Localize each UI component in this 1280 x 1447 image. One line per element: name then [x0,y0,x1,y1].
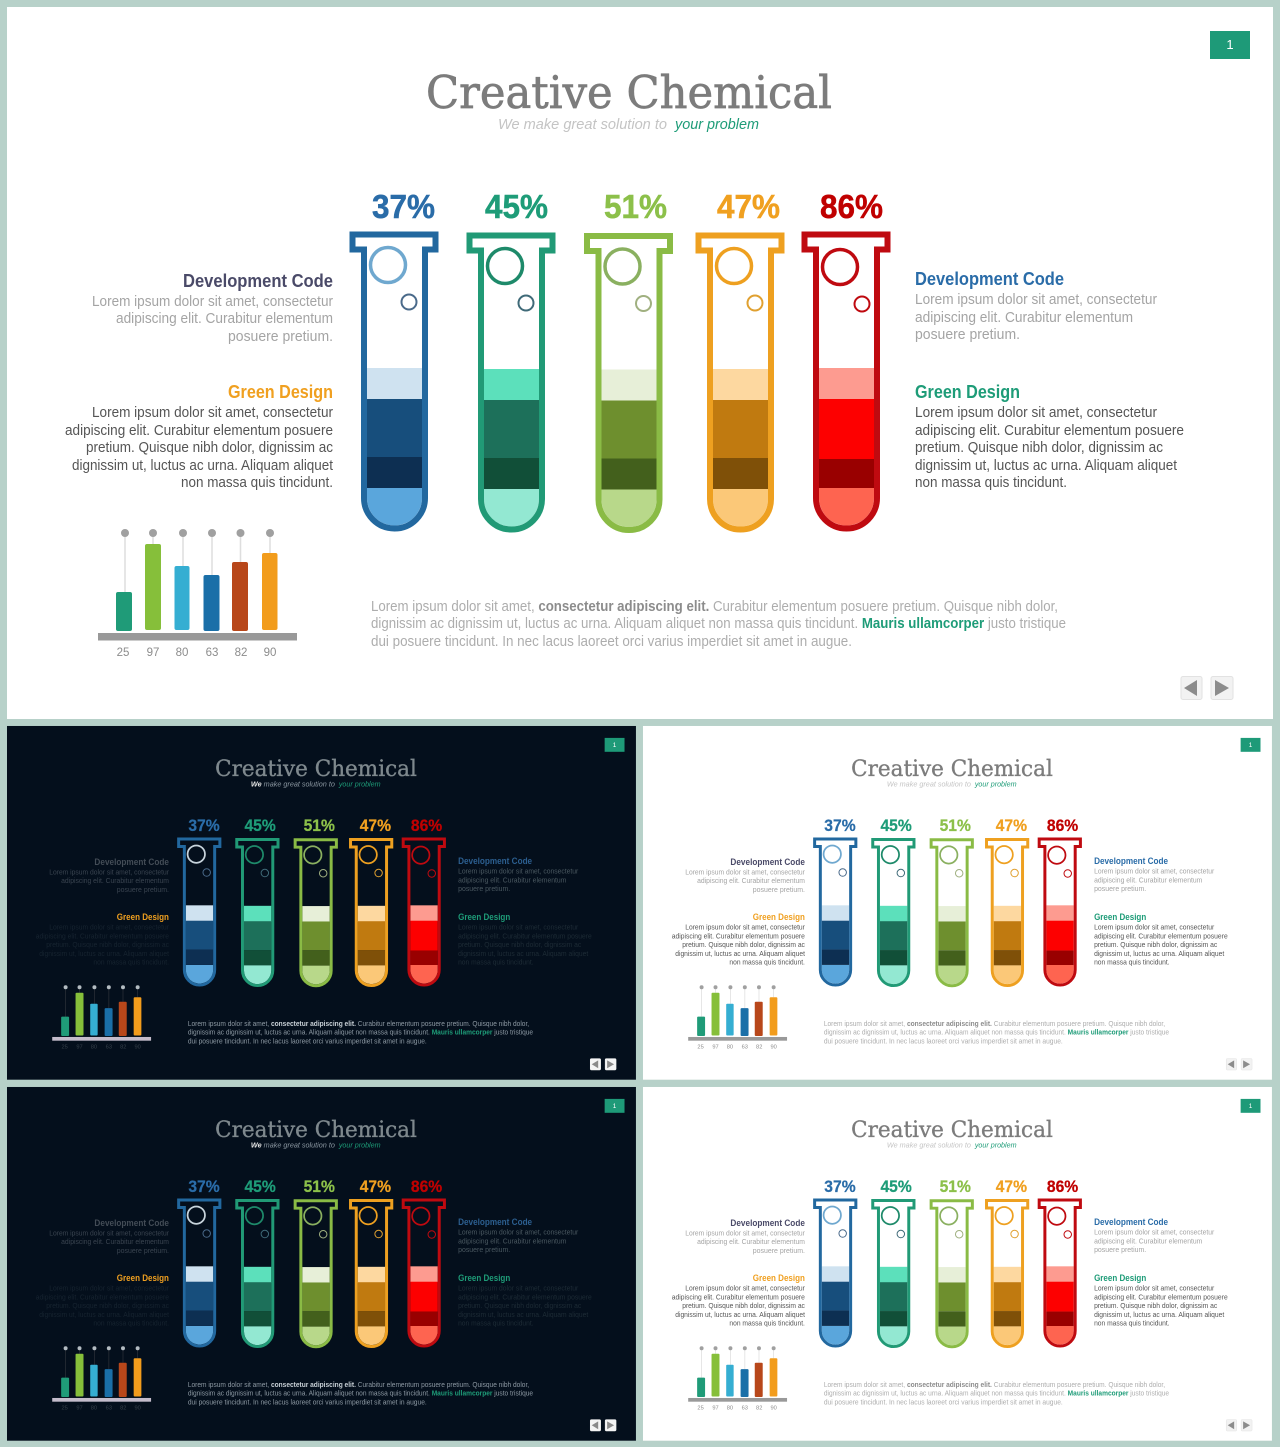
bar chart: 90 [770,1405,777,1411]
test tube: orange 47% [698,236,782,529]
right text: green design: dignissim ut, luctus ac urna. Aliquam aliquet [458,949,588,958]
left text: green design: Lorem ipsum dolor sit amet, consectetur [49,1284,170,1293]
left text: green design: non massa quis tincidunt. [93,1318,169,1327]
left text: green design: non massa quis tincidunt. [93,957,169,966]
percent labels: 51% [604,188,667,225]
page number badge [1241,738,1260,752]
percent labels: 47% [717,188,780,225]
right text: green design: dignissim ut, luctus ac urna. Aliquam aliquet [915,458,1177,474]
percent labels: 45% [880,817,912,835]
percent labels: 45% [244,1178,276,1196]
right text: green design: adipiscing elit. Curabitur elementum posuere [915,423,1184,439]
panel: dark slide bottom left [7,1087,636,1441]
left text: green design: dignissim ut, luctus ac urna. Aliquam aliquet [39,1310,169,1319]
test tube: green 45% [237,839,278,986]
test tube: red 86% [403,839,444,985]
right text: green design [1094,912,1228,966]
right text: development code: Lorem ipsum dolor sit amet, consectetur [1094,867,1215,876]
left text: green design: non massa quis tincidunt. [729,1318,805,1327]
test tube: blue 37% [815,839,856,985]
right text: development code [915,269,1157,343]
test tube: orange 47% [351,1200,392,1347]
subtitle: We make great solution to [498,116,667,133]
bottom paragraph: dignissim ac dignissim ut, luctus ac urna. Aliquam aliquet non massa quis tincidunt. Mauris ullamcorper justo tristique [824,1388,1169,1397]
bottom paragraph [188,1019,533,1045]
right text: development code: posuere pretium. [1094,884,1146,893]
subtitle: your problem [974,780,1017,789]
test tube: red 86% [1039,1200,1080,1346]
left text: development code: adipiscing elit. Curabitur elementum [61,876,169,885]
right text: green design: adipiscing elit. Curabitur elementum posuere [458,1293,592,1302]
right text: development code: posuere pretium. [915,327,1020,343]
left text: green design: adipiscing elit. Curabitur elementum posuere [36,932,169,941]
bar chart [52,1346,151,1411]
title: Creative Chemical [851,1117,1053,1143]
subtitle: We make great solution to [887,1141,971,1150]
percent labels: 86% [411,817,443,835]
right text: green design [458,1273,592,1327]
subtitle [498,116,759,133]
right text: development code: Development Code [458,856,532,866]
bar chart: 82 [235,647,247,659]
left text: development code [92,271,333,345]
right text: development code: adipiscing elit. Curabitur elementum [458,875,566,884]
test tube: lime 51% [295,840,336,986]
bar chart: 25 [697,1405,704,1411]
percent labels: 45% [880,1178,912,1196]
right text: green design: Lorem ipsum dolor sit amet, consectetur [915,405,1157,421]
test tube: green 45% [237,1200,278,1347]
right text: green design: Green Design [915,382,1020,402]
percent labels: 37% [824,1178,856,1196]
left text: development code: Development Code [183,271,333,291]
right text: green design: pretium. Quisque nibh dolor, dignissim ac [1094,1301,1218,1310]
page number badge: 1 [1226,37,1234,52]
left text: development code: Development Code [94,857,169,867]
right text: development code: Lorem ipsum dolor sit amet, consectetur [458,867,579,876]
left text: green design: Green Design [753,1273,805,1283]
percent labels: 37% [188,817,220,835]
subtitle: We make great solution to [251,780,335,789]
right text: green design: adipiscing elit. Curabitur elementum posuere [458,932,592,941]
bottom paragraph: Lorem ipsum dolor sit amet, consectetur adipiscing elit. Curabitur elementum posuere pretium. Quisque nibh dolor, [188,1019,529,1028]
left text: green design [65,382,333,491]
left text: development code: adipiscing elit. Curabitur elementum [116,311,333,327]
left text: green design: Green Design [117,912,169,922]
bar chart: 82 [120,1044,126,1050]
right text: development code: Lorem ipsum dolor sit amet, consectetur [458,1228,579,1237]
percent labels [824,1178,1079,1196]
bar chart: 25 [61,1405,68,1411]
right text: green design: Green Design [458,1273,510,1283]
bar chart: 97 [712,1044,719,1050]
page number badge [1210,31,1250,59]
left text: development code: Lorem ipsum dolor sit amet, consectetur [685,1229,805,1238]
subtitle: your problem [338,780,381,789]
bottom paragraph: dui posuere tincidunt. In nec lacus laoreet orci varius imperdiet sit amet in augue. [188,1036,427,1045]
subtitle: your problem [974,1141,1017,1150]
right text: green design: Lorem ipsum dolor sit amet, consectetur [458,923,579,932]
left text: green design: adipiscing elit. Curabitur elementum posuere [65,423,333,439]
bar chart [52,985,151,1050]
right text: development code [1094,1217,1215,1254]
bar chart: 97 [76,1044,83,1050]
bar chart: 63 [742,1044,748,1050]
test tube: red 86% [1039,839,1080,985]
subtitle: your problem [338,1141,381,1150]
right text: green design: Green Design [458,912,510,922]
page number badge: 1 [613,742,617,749]
percent labels: 86% [1047,1178,1079,1196]
right text: development code: Development Code [458,1217,532,1227]
right text: development code [458,1217,579,1254]
page number badge [1241,1099,1260,1113]
bottom paragraph: dignissim ac dignissim ut, luctus ac urna. Aliquam aliquet non massa quis tincidunt. Mauris ullamcorper justo tristique [824,1027,1169,1036]
percent labels [188,817,443,835]
left text: green design [36,912,170,966]
title: Creative Chemical [215,1117,417,1143]
left text: green design: Green Design [117,1273,169,1283]
bottom paragraph: Lorem ipsum dolor sit amet, consectetur adipiscing elit. Curabitur elementum posuere pretium. Quisque nibh dolor, [824,1380,1165,1389]
subtitle: your problem [674,116,759,133]
test tube: blue 37% [815,1200,856,1346]
left text: development code: Development Code [730,1218,805,1228]
bar chart: 82 [756,1044,762,1050]
right text: development code: Lorem ipsum dolor sit amet, consectetur [915,292,1157,308]
left text: green design: non massa quis tincidunt. [729,957,805,966]
left text: development code: Development Code [94,1218,169,1228]
right text: development code: adipiscing elit. Curabitur elementum [915,310,1133,326]
percent labels: 51% [304,817,335,835]
bottom paragraph: dignissim ac dignissim ut, luctus ac urna. Aliquam aliquet non massa quis tincidunt. Mauris ullamcorper justo tristique [371,616,1066,632]
left text: development code [49,1218,170,1255]
subtitle: We make great solution to [251,1141,335,1150]
left text: green design: dignissim ut, luctus ac urna. Aliquam aliquet [675,1310,805,1319]
right text: green design: pretium. Quisque nibh dolor, dignissim ac [915,440,1163,456]
test tube: blue 37% [179,1200,220,1346]
test tube: orange 47% [987,839,1028,986]
right text: green design: pretium. Quisque nibh dolor, dignissim ac [1094,940,1218,949]
bar chart: 63 [106,1044,112,1050]
left text: development code [49,857,170,894]
right text: development code [1094,856,1215,893]
right text: green design: non massa quis tincidunt. [1094,1318,1170,1327]
left text: green design: Lorem ipsum dolor sit amet, consectetur [49,923,170,932]
right text: development code [458,856,579,893]
left text: green design: dignissim ut, luctus ac urna. Aliquam aliquet [675,949,805,958]
bar chart: 90 [134,1044,141,1050]
left text: development code: posuere pretium. [753,885,805,894]
percent labels [188,1178,443,1196]
test tube: red 86% [403,1200,444,1346]
left text: green design: pretium. Quisque nibh dolor, dignissim ac [46,940,169,949]
bar chart: 80 [91,1405,97,1411]
left text: green design: Lorem ipsum dolor sit amet, consectetur [685,1284,805,1293]
bar chart: 90 [134,1405,141,1411]
title: Creative Chemical [426,66,832,119]
bottom paragraph: Lorem ipsum dolor sit amet, consectetur adipiscing elit. Curabitur elementum posuere pretium. Quisque nibh dolor, [824,1019,1165,1028]
bar chart: 63 [742,1405,748,1411]
panel: light slide bottom right [643,1087,1272,1441]
right text: green design: pretium. Quisque nibh dolor, dignissim ac [458,940,582,949]
percent labels: 37% [188,1178,220,1196]
bar chart: 63 [106,1405,112,1411]
page number badge: 1 [1249,1103,1253,1110]
subtitle [887,1141,1017,1150]
left text: development code: Development Code [730,857,805,867]
right text: green design: dignissim ut, luctus ac urna. Aliquam aliquet [1094,949,1224,958]
bar chart: 80 [176,647,188,659]
page number badge: 1 [613,1103,617,1110]
bar chart: 63 [206,647,218,659]
left text: green design: dignissim ut, luctus ac urna. Aliquam aliquet [72,458,333,474]
left text: development code: Lorem ipsum dolor sit amet, consectetur [49,1229,170,1238]
bar chart [98,529,297,659]
navigation arrows [1226,1059,1252,1070]
page number badge: 1 [1249,742,1253,749]
panel: light slide top right [643,726,1272,1080]
title: Creative Chemical [851,756,1053,782]
left text: green design: non massa quis tincidunt. [181,475,333,491]
left text: development code: posuere pretium. [228,329,333,345]
left text: development code: Lorem ipsum dolor sit amet, consectetur [49,868,170,877]
navigation arrows [1181,676,1233,700]
bar chart: 25 [697,1044,704,1050]
bar chart: 80 [727,1044,733,1050]
percent labels: 37% [824,817,856,835]
bottom paragraph: dui posuere tincidunt. In nec lacus laoreet orci varius imperdiet sit amet in augue. [824,1036,1063,1045]
page number badge [605,1099,625,1113]
right text: green design: pretium. Quisque nibh dolor, dignissim ac [458,1301,582,1310]
bottom paragraph [824,1019,1169,1045]
test tube: green 45% [470,236,552,529]
test tube: lime 51% [295,1201,336,1347]
left text: green design: Lorem ipsum dolor sit amet, consectetur [685,923,805,932]
right text: development code: adipiscing elit. Curabitur elementum [1094,875,1202,884]
bar chart: 25 [117,647,129,659]
left text: green design [672,912,805,966]
bar chart: 90 [264,647,276,659]
bar chart: 90 [770,1044,777,1050]
test tube: blue 37% [352,234,436,528]
right text: green design: dignissim ut, luctus ac urna. Aliquam aliquet [458,1310,588,1319]
test tube: orange 47% [351,839,392,986]
bottom paragraph [824,1380,1169,1406]
left text: green design: Green Design [228,382,333,402]
left text: development code: posuere pretium. [753,1246,805,1255]
bar chart: 80 [91,1044,97,1050]
right text: green design: non massa quis tincidunt. [458,1318,534,1327]
percent labels: 37% [372,188,435,225]
left text: green design: Green Design [753,912,805,922]
navigation arrows [590,1420,616,1431]
percent labels: 86% [411,1178,443,1196]
right text: development code: adipiscing elit. Curabitur elementum [458,1236,566,1245]
right text: green design: Green Design [1094,912,1146,922]
test tube: lime 51% [931,840,972,986]
bottom paragraph [188,1380,533,1406]
right text: green design: non massa quis tincidunt. [915,475,1067,491]
percent labels: 86% [1047,817,1079,835]
right text: development code: posuere pretium. [458,1245,510,1254]
right text: green design: non massa quis tincidunt. [458,957,534,966]
left text: development code [685,1218,805,1255]
left text: development code [685,857,805,894]
left text: green design: pretium. Quisque nibh dolor, dignissim ac [682,1301,805,1310]
bottom paragraph: dui posuere tincidunt. In nec lacus laoreet orci varius imperdiet sit amet in augue. [824,1397,1063,1406]
percent labels: 51% [940,1178,971,1196]
test tube: orange 47% [987,1200,1028,1347]
right text: development code: posuere pretium. [1094,1245,1146,1254]
subtitle: We make great solution to [887,780,971,789]
right text: development code: posuere pretium. [458,884,510,893]
test tube: red 86% [804,234,888,528]
percent labels: 45% [485,188,548,225]
left text: green design: Lorem ipsum dolor sit amet, consectetur [92,405,333,421]
left text: development code: posuere pretium. [117,1246,169,1255]
percent labels: 47% [996,817,1027,835]
bar chart: 97 [76,1405,83,1411]
bottom paragraph [371,599,1066,650]
right text: green design [458,912,592,966]
left text: development code: adipiscing elit. Curabitur elementum [697,876,805,885]
left text: green design: dignissim ut, luctus ac urna. Aliquam aliquet [39,949,169,958]
right text: development code: Lorem ipsum dolor sit amet, consectetur [1094,1228,1215,1237]
right text: development code: Development Code [1094,856,1168,866]
left text: green design [36,1273,170,1327]
page number badge [605,738,625,752]
test tube: blue 37% [179,839,220,985]
subtitle [251,780,381,789]
bar chart: 25 [61,1044,68,1050]
left text: green design: adipiscing elit. Curabitur elementum posuere [36,1293,169,1302]
percent labels: 51% [304,1178,335,1196]
bottom paragraph: dignissim ac dignissim ut, luctus ac urna. Aliquam aliquet non massa quis tincidunt. Mauris ullamcorper justo tristique [188,1027,533,1036]
right text: green design: dignissim ut, luctus ac urna. Aliquam aliquet [1094,1310,1224,1319]
navigation arrows [590,1059,616,1070]
bottom paragraph: Lorem ipsum dolor sit amet, consectetur adipiscing elit. Curabitur elementum posuere pretium. Quisque nibh dolor, [188,1380,529,1389]
bottom paragraph: dui posuere tincidunt. In nec lacus laoreet orci varius imperdiet sit amet in augue. [371,634,852,650]
navigation arrows [1226,1420,1252,1431]
right text: green design [915,382,1184,491]
panel: main white slide [7,7,1273,719]
panel: dark slide top left [7,726,636,1080]
bar chart [688,985,787,1050]
left text: green design: pretium. Quisque nibh dolor, dignissim ac [86,440,333,456]
left text: development code: Lorem ipsum dolor sit amet, consectetur [685,868,805,877]
left text: green design [672,1273,805,1327]
right text: green design: Green Design [1094,1273,1146,1283]
title: Creative Chemical [215,756,417,782]
percent labels: 45% [244,817,276,835]
right text: green design: Lorem ipsum dolor sit amet, consectetur [458,1284,579,1293]
percent labels: 51% [940,817,971,835]
left text: green design: pretium. Quisque nibh dolor, dignissim ac [46,1301,169,1310]
bottom paragraph: dui posuere tincidunt. In nec lacus laoreet orci varius imperdiet sit amet in augue. [188,1397,427,1406]
right text: green design: Lorem ipsum dolor sit amet, consectetur [1094,923,1215,932]
bar chart: 97 [147,647,159,659]
bar chart [688,1346,787,1411]
left text: green design: pretium. Quisque nibh dolor, dignissim ac [682,940,805,949]
right text: green design [1094,1273,1228,1327]
left text: green design: adipiscing elit. Curabitur elementum posuere [672,1293,805,1302]
right text: green design: adipiscing elit. Curabitur elementum posuere [1094,932,1228,941]
percent labels: 86% [820,188,883,225]
left text: development code: Lorem ipsum dolor sit amet, consectetur [92,294,333,310]
right text: green design: Lorem ipsum dolor sit amet, consectetur [1094,1284,1215,1293]
percent labels: 47% [996,1178,1027,1196]
bar chart: 97 [712,1405,719,1411]
left text: development code: posuere pretium. [117,885,169,894]
bar chart: 82 [756,1405,762,1411]
left text: development code: adipiscing elit. Curabitur elementum [61,1237,169,1246]
right text: development code: Development Code [915,269,1064,289]
test tube: green 45% [873,1200,914,1347]
right text: development code: Development Code [1094,1217,1168,1227]
bottom paragraph: Lorem ipsum dolor sit amet, consectetur adipiscing elit. Curabitur elementum posuere pretium. Quisque nibh dolor, [371,599,1058,615]
percent labels [372,188,883,225]
bar chart: 80 [727,1405,733,1411]
test tube: lime 51% [931,1201,972,1347]
percent labels [824,817,1079,835]
left text: green design: adipiscing elit. Curabitur elementum posuere [672,932,805,941]
subtitle [887,780,1017,789]
test tube: lime 51% [587,236,670,530]
right text: green design: adipiscing elit. Curabitur elementum posuere [1094,1293,1228,1302]
percent labels: 47% [360,817,391,835]
bar chart: 82 [120,1405,126,1411]
right text: development code: adipiscing elit. Curabitur elementum [1094,1236,1202,1245]
left text: development code: adipiscing elit. Curabitur elementum [697,1237,805,1246]
right text: green design: non massa quis tincidunt. [1094,957,1170,966]
subtitle [251,1141,381,1150]
bottom paragraph: dignissim ac dignissim ut, luctus ac urna. Aliquam aliquet non massa quis tincidunt. Mauris ullamcorper justo tristique [188,1388,533,1397]
test tube: green 45% [873,839,914,986]
percent labels: 47% [360,1178,391,1196]
